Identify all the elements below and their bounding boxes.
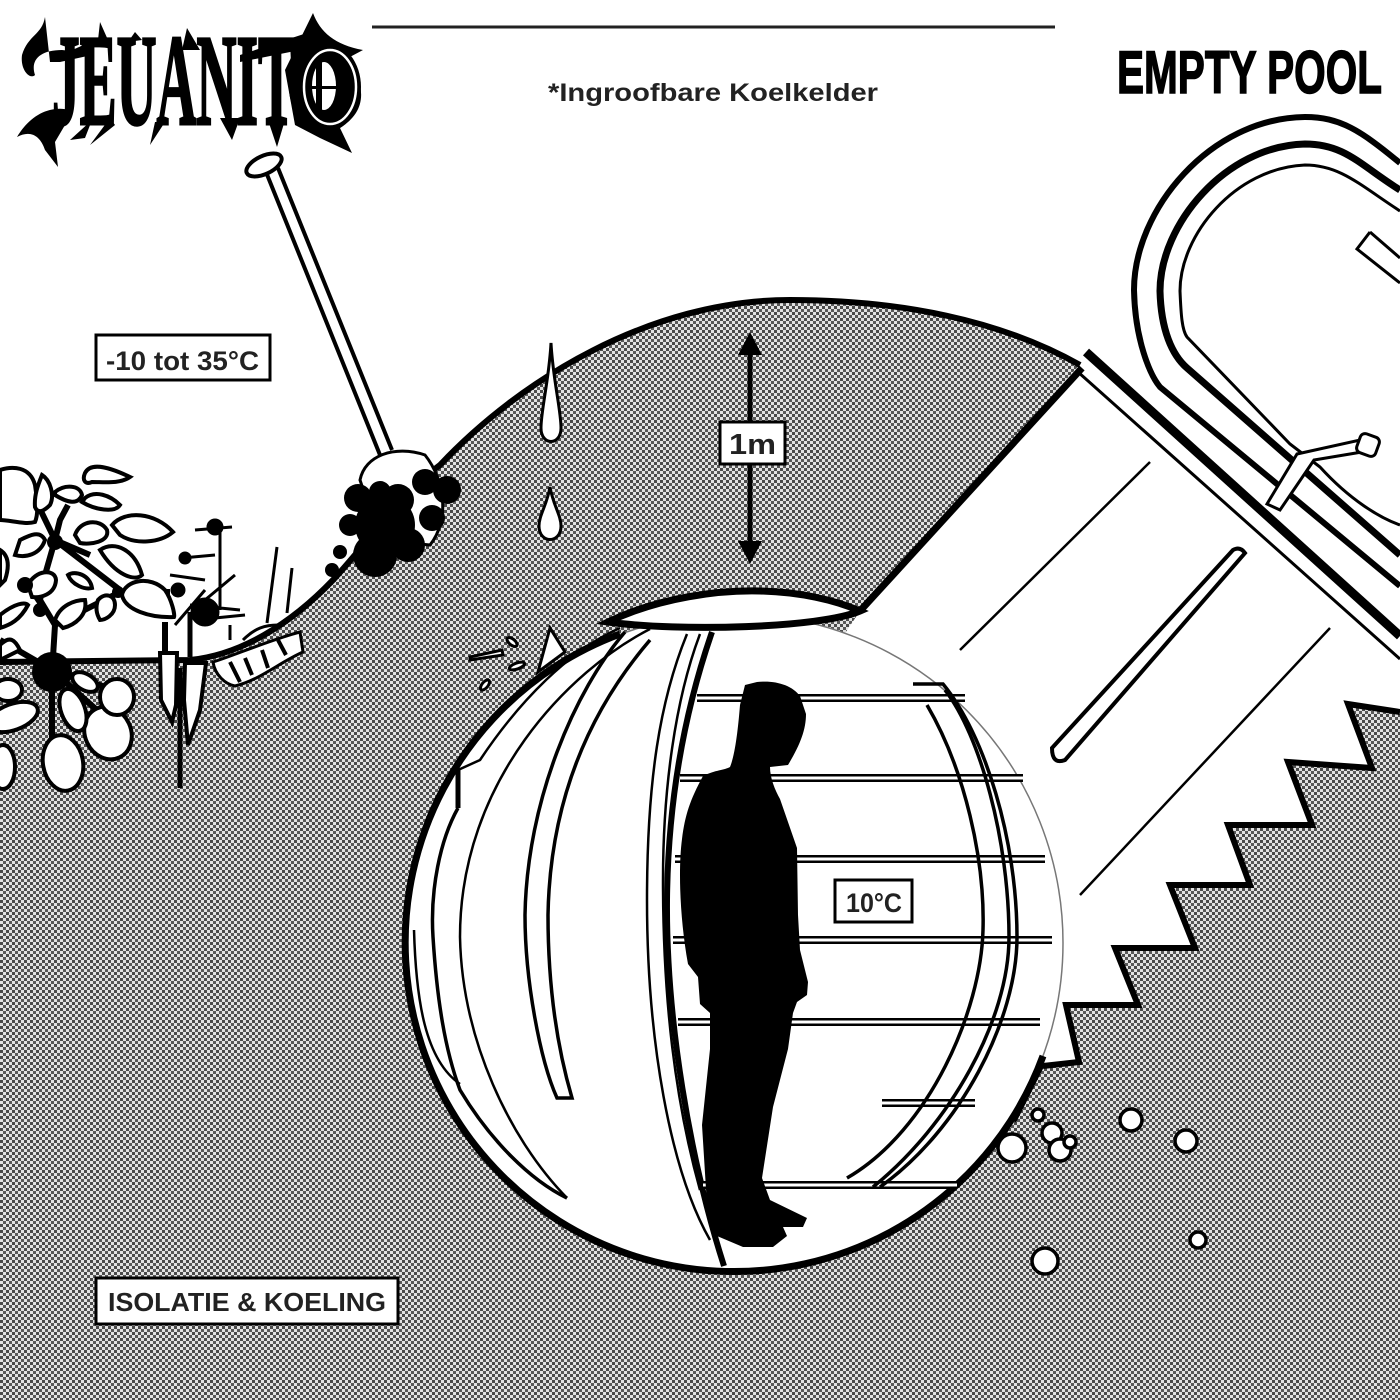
hatch handle (1267, 432, 1381, 510)
label: isolatie en koeling: ISOLATIE & KOELING (108, 1287, 386, 1317)
shovel (243, 149, 443, 545)
stems behind leaves (0, 505, 170, 760)
arrow: 1m depth (738, 332, 762, 564)
ramp and stairs cutout (800, 362, 1400, 1066)
label: isolatie en koeling (96, 1278, 398, 1324)
stem joints (17, 534, 124, 692)
water drops (538, 343, 565, 672)
label: 1m (720, 422, 785, 464)
potato plant (0, 467, 174, 794)
hull thick arc (405, 634, 1043, 1272)
pool lid (1078, 117, 1400, 659)
lid slot (1357, 232, 1400, 283)
sphere ribs (673, 698, 1052, 1185)
left side panel (432, 808, 567, 1198)
subtitle: *Ingroofbare Koelkelder (548, 79, 878, 107)
right arcs of frame (847, 684, 1017, 1187)
water splash (470, 636, 526, 692)
tubers (0, 668, 140, 794)
stairs outline (1043, 704, 1400, 1066)
carrots (160, 653, 206, 788)
air bubbles (998, 1109, 1206, 1274)
label: 10 degrees: 10°C (846, 888, 902, 918)
sphere shell (405, 628, 1043, 1272)
hatch frame edge (1086, 352, 1400, 636)
label: temperature: -10 tot 35°C (106, 346, 259, 376)
leaves (0, 467, 174, 660)
ramp left wall (860, 368, 1082, 611)
ramp lines (960, 462, 1330, 895)
hull right rail (1015, 1066, 1043, 1122)
ground surface line (0, 300, 1080, 662)
sphere body (405, 614, 1063, 1272)
inner crescent (525, 632, 650, 1098)
door edge lines (647, 634, 710, 1240)
hatch lens (608, 591, 860, 627)
logo: juanito (17, 9, 363, 167)
carrot tops (165, 520, 292, 657)
soil clump (325, 469, 461, 577)
ground halftone (0, 300, 1400, 1400)
label: 10 degrees (835, 880, 912, 922)
onion root (213, 625, 303, 686)
ramp tube (1052, 549, 1245, 761)
top rule (372, 26, 1055, 28)
text: JEUANITO (52, 9, 337, 153)
label: 1m: 1m (729, 429, 776, 461)
label: temperature (96, 335, 270, 380)
lid inner rim (1180, 165, 1400, 525)
person silhouette (680, 682, 808, 1247)
lid mid rim (1160, 144, 1400, 555)
lid outer rim (1134, 117, 1400, 586)
